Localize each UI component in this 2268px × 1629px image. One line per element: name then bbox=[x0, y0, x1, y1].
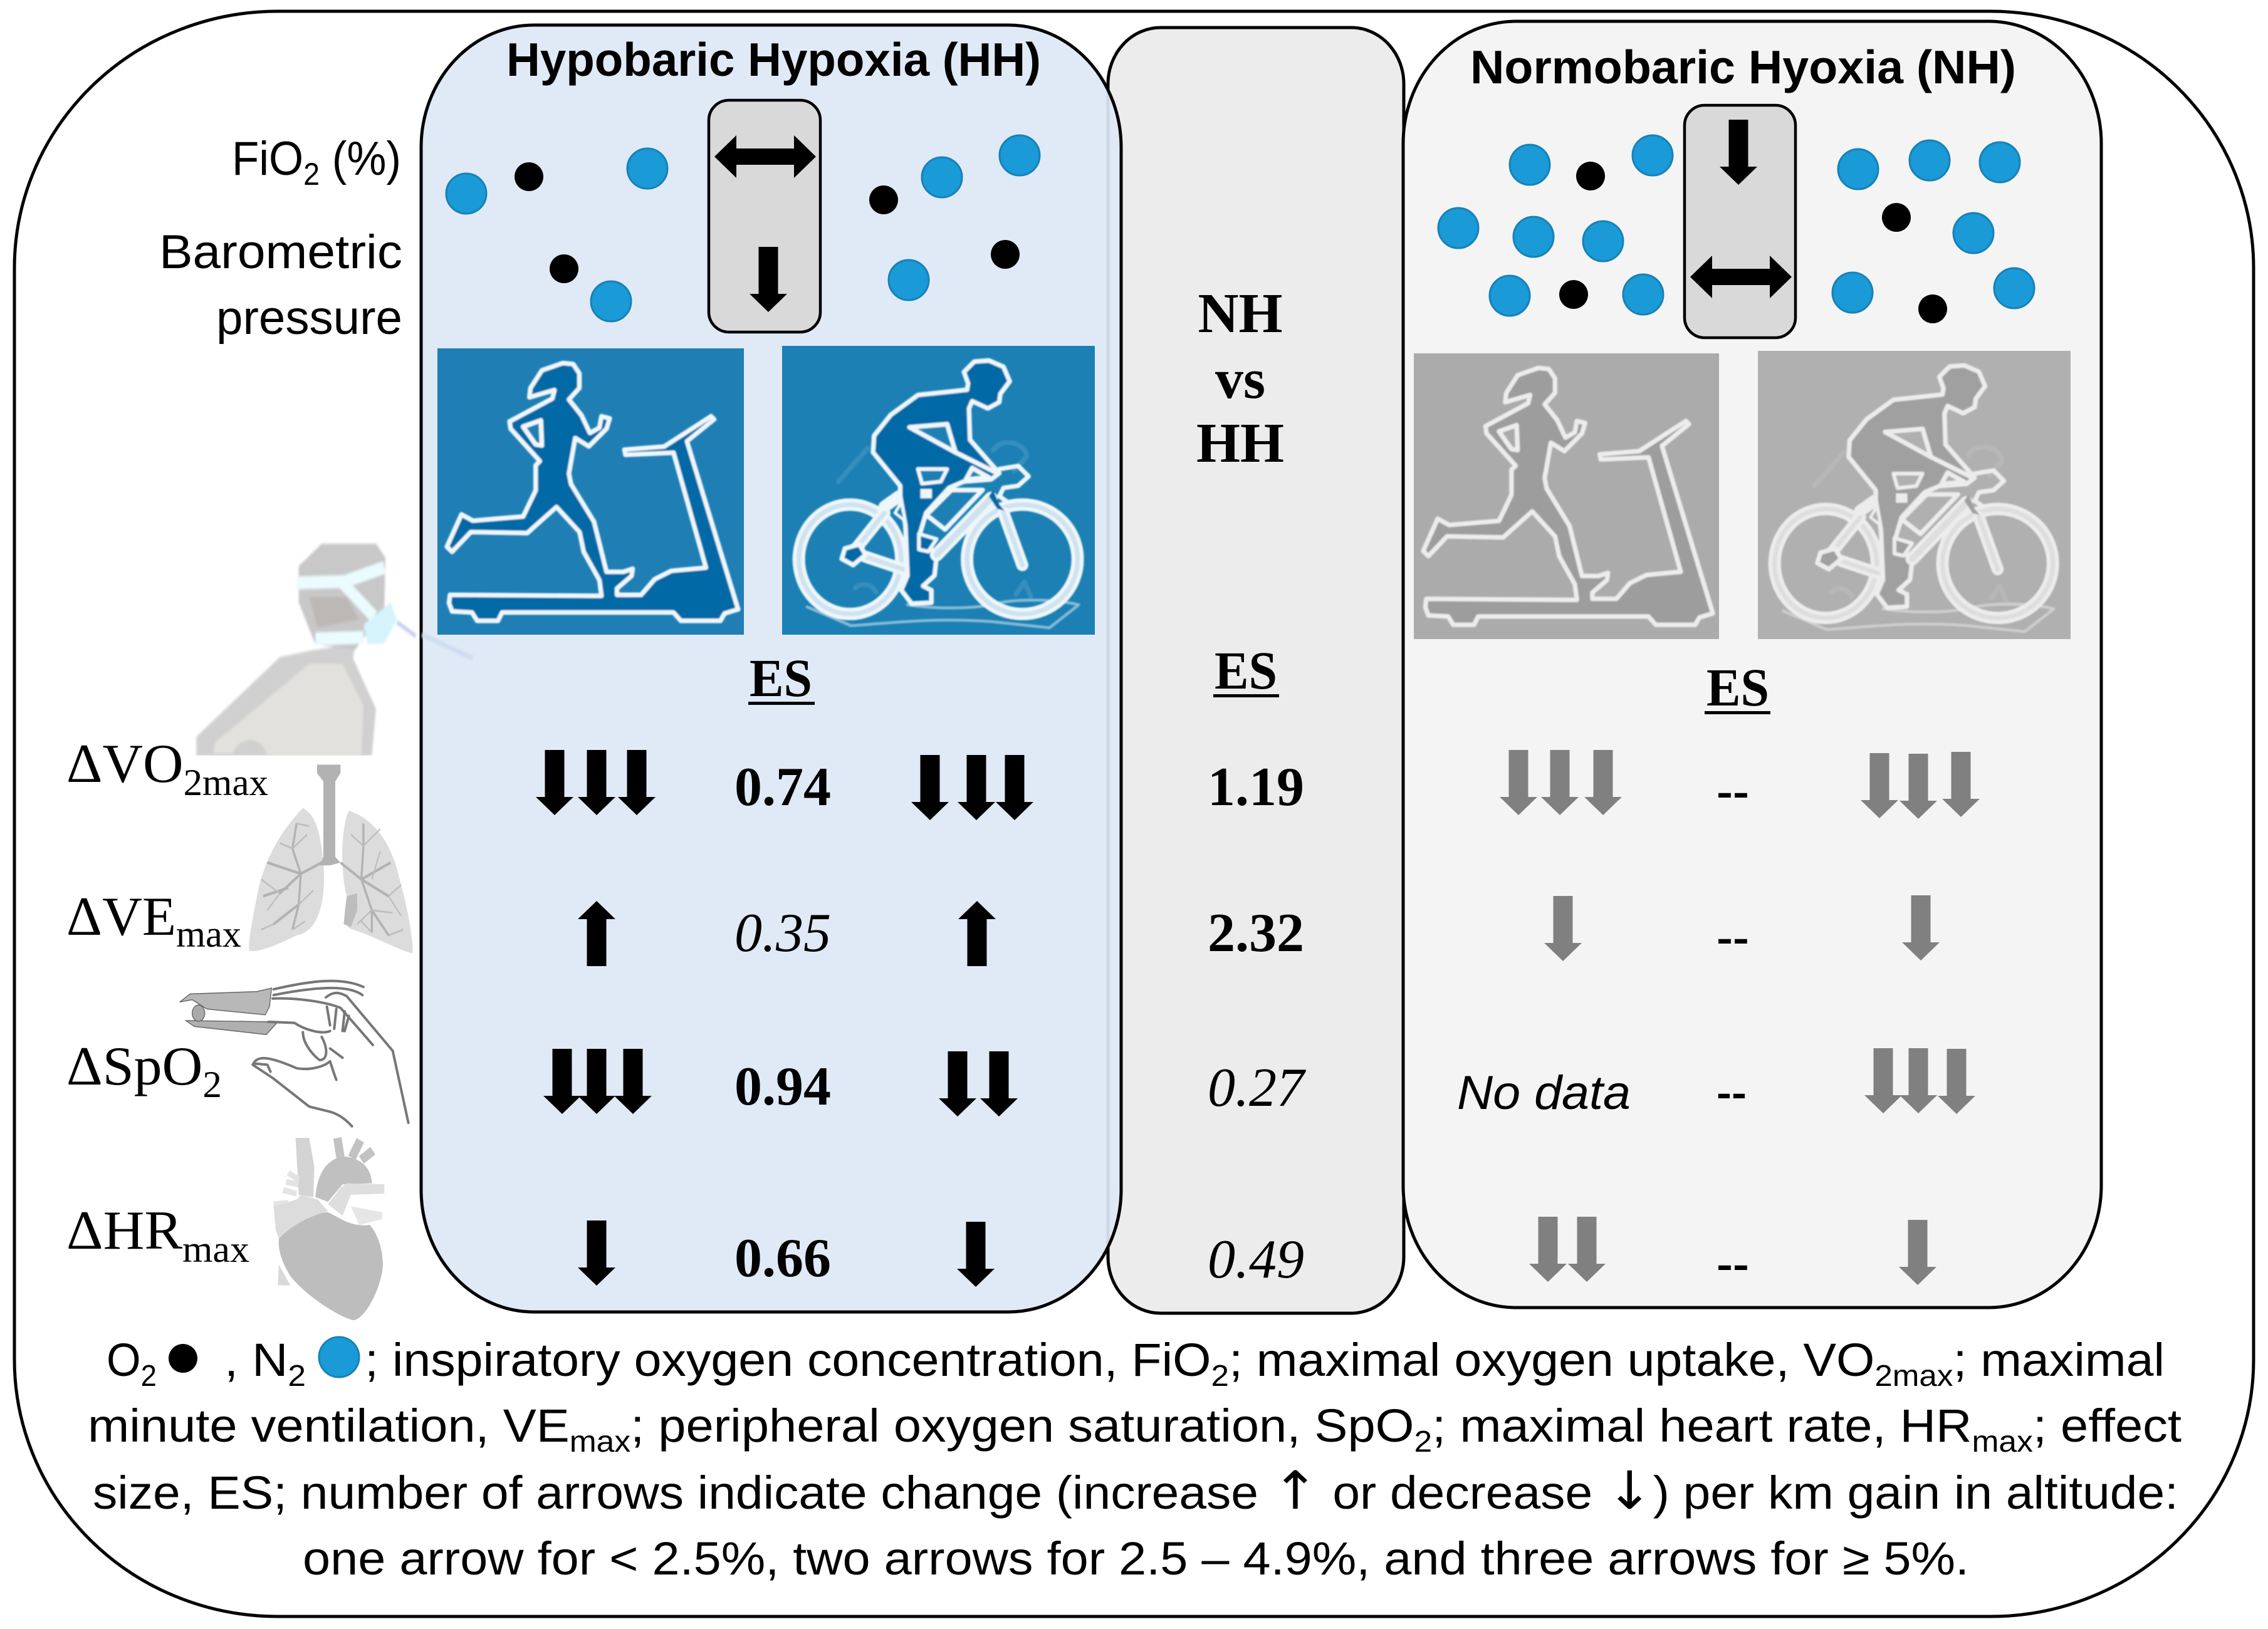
caption legend and notes: 2 bbox=[1211, 1360, 1229, 1393]
heading: NH vs HH: NH bbox=[1198, 283, 1282, 345]
indicator box: FiO2 lower, pressure same bbox=[1685, 105, 1795, 338]
caption legend and notes bbox=[88, 1334, 2182, 1585]
gas molecules: NH bbox=[1438, 135, 2034, 323]
row labels: FiO2 and barometric pressure: Barometric bbox=[159, 226, 402, 279]
caption legend and notes: ; effect bbox=[2033, 1400, 2182, 1452]
icon: lungs bbox=[249, 765, 412, 954]
caption legend and notes: minute ventilation, VE bbox=[88, 1400, 536, 1452]
effect size values: comparison: 2.32 bbox=[1208, 903, 1304, 964]
legend: oxygen dot bbox=[169, 1344, 197, 1373]
row label: VEmax: ΔVE bbox=[66, 887, 175, 947]
caption legend and notes: size, ES; number of arrows indicate change (increase ↑ or decrease ↓) per km gain in altitude: bbox=[93, 1460, 2178, 1521]
arrows: HH treadmill bbox=[536, 750, 656, 1286]
caption legend and notes: one arrow for < 2.5%, two arrows for 2.5 – 4.9%, and three arrows for ≥ 5%. bbox=[303, 1533, 1969, 1585]
icon: treadmill runner NH bbox=[1414, 353, 1719, 639]
effect size values: HH: 0.94 bbox=[734, 1056, 831, 1117]
caption legend and notes: 2 bbox=[1414, 1425, 1432, 1459]
caption legend and notes: ; maximal heart rate, HR bbox=[1432, 1400, 1972, 1452]
row labels: FiO2 and barometric pressure: (%) bbox=[320, 132, 401, 185]
row label: VO2max: 2max bbox=[184, 762, 268, 803]
row label: SpO2: 2 bbox=[202, 1064, 222, 1105]
caption legend and notes: ; maximal oxygen uptake, VO bbox=[1229, 1334, 1874, 1386]
caption legend and notes: O bbox=[107, 1334, 143, 1386]
row labels: FiO2 and barometric pressure: 2 bbox=[303, 157, 320, 192]
row label: HRmax: max bbox=[182, 1229, 249, 1270]
caption legend and notes: 2 bbox=[141, 1360, 157, 1393]
effect size values: HH bbox=[734, 757, 831, 1289]
heading: normobaric hypoxia: Normobaric Hyoxia (NH) bbox=[1470, 41, 2016, 93]
effect size values: comparison: 0.27 bbox=[1208, 1058, 1307, 1118]
dash placeholders: NH effect sizes: -- bbox=[1717, 771, 1749, 813]
dash placeholders: NH effect sizes: -- bbox=[1717, 1072, 1747, 1114]
caption legend and notes: max bbox=[570, 1425, 630, 1459]
legend: nitrogen dot bbox=[319, 1337, 359, 1377]
effect size values: comparison: 1.19 bbox=[1208, 757, 1304, 818]
row label: SpO2: ΔSpO bbox=[66, 1036, 200, 1097]
heading: NH vs HH: vs bbox=[1215, 348, 1265, 410]
row label: HRmax: ΔHR bbox=[66, 1200, 179, 1261]
icon: pulse oximeter on finger bbox=[180, 981, 409, 1127]
gas molecules: HH bbox=[446, 135, 1040, 321]
caption legend and notes: ; maximal bbox=[1953, 1334, 2165, 1386]
heading: NH vs HH: HH bbox=[1196, 412, 1284, 474]
dash placeholders: NH effect sizes: -- bbox=[1717, 917, 1749, 959]
row label: VO2max: ΔVO bbox=[66, 734, 182, 794]
caption legend and notes: 2max bbox=[1874, 1360, 1953, 1393]
arrows: HH cycling bbox=[911, 755, 1033, 1287]
ES heading: NH: ES bbox=[1706, 657, 1769, 717]
ES heading: HH: ES bbox=[750, 648, 812, 708]
dash placeholders: NH effect sizes: -- bbox=[1717, 1244, 1749, 1286]
row labels: FiO2 and barometric pressure: FiO bbox=[232, 132, 308, 185]
effect size values: HH: 0.66 bbox=[734, 1228, 831, 1289]
panel: hypobaric hypoxia bbox=[421, 25, 1121, 1312]
no data note: No data bbox=[1457, 1066, 1631, 1120]
effect size values: comparison: 0.49 bbox=[1208, 1229, 1304, 1290]
caption legend and notes: ; inspiratory oxygen concentration, FiO bbox=[365, 1334, 1159, 1386]
row labels: FiO2 and barometric pressure: pressure bbox=[216, 291, 402, 345]
icon: person with mask bbox=[184, 544, 473, 764]
icon: cyclist HH bbox=[782, 346, 1095, 635]
ES heading: comparison: ES bbox=[1215, 640, 1277, 700]
arrows: NH cycling bbox=[1861, 752, 1980, 1285]
icon: heart bbox=[274, 1138, 384, 1320]
heading: hypobaric hypoxia: Hypobaric Hypoxia (HH) bbox=[506, 33, 1041, 86]
effect size values: comparison bbox=[1208, 757, 1307, 1290]
dash placeholders: NH effect sizes bbox=[1717, 771, 1749, 1286]
caption legend and notes: ; peripheral oxygen saturation, SpO bbox=[630, 1400, 1414, 1452]
caption legend and notes: max bbox=[1972, 1425, 2033, 1459]
row labels: FiO2 and barometric pressure bbox=[159, 132, 402, 345]
panel: NH vs HH comparison bbox=[1108, 28, 1404, 1313]
icon: treadmill runner HH bbox=[437, 348, 744, 635]
panel: normobaric hypoxia bbox=[1403, 21, 2101, 1308]
arrows: NH treadmill bbox=[1500, 750, 1622, 1282]
caption legend and notes: 2 bbox=[288, 1360, 306, 1393]
effect size values: HH: 0.74 bbox=[734, 757, 831, 818]
caption legend and notes: , N bbox=[224, 1334, 284, 1386]
effect size values: HH: 0.35 bbox=[734, 903, 831, 964]
row label: VEmax: max bbox=[176, 913, 241, 955]
icon: cyclist NH bbox=[1758, 351, 2071, 639]
indicator box: FiO2 same, pressure lower bbox=[709, 100, 820, 332]
